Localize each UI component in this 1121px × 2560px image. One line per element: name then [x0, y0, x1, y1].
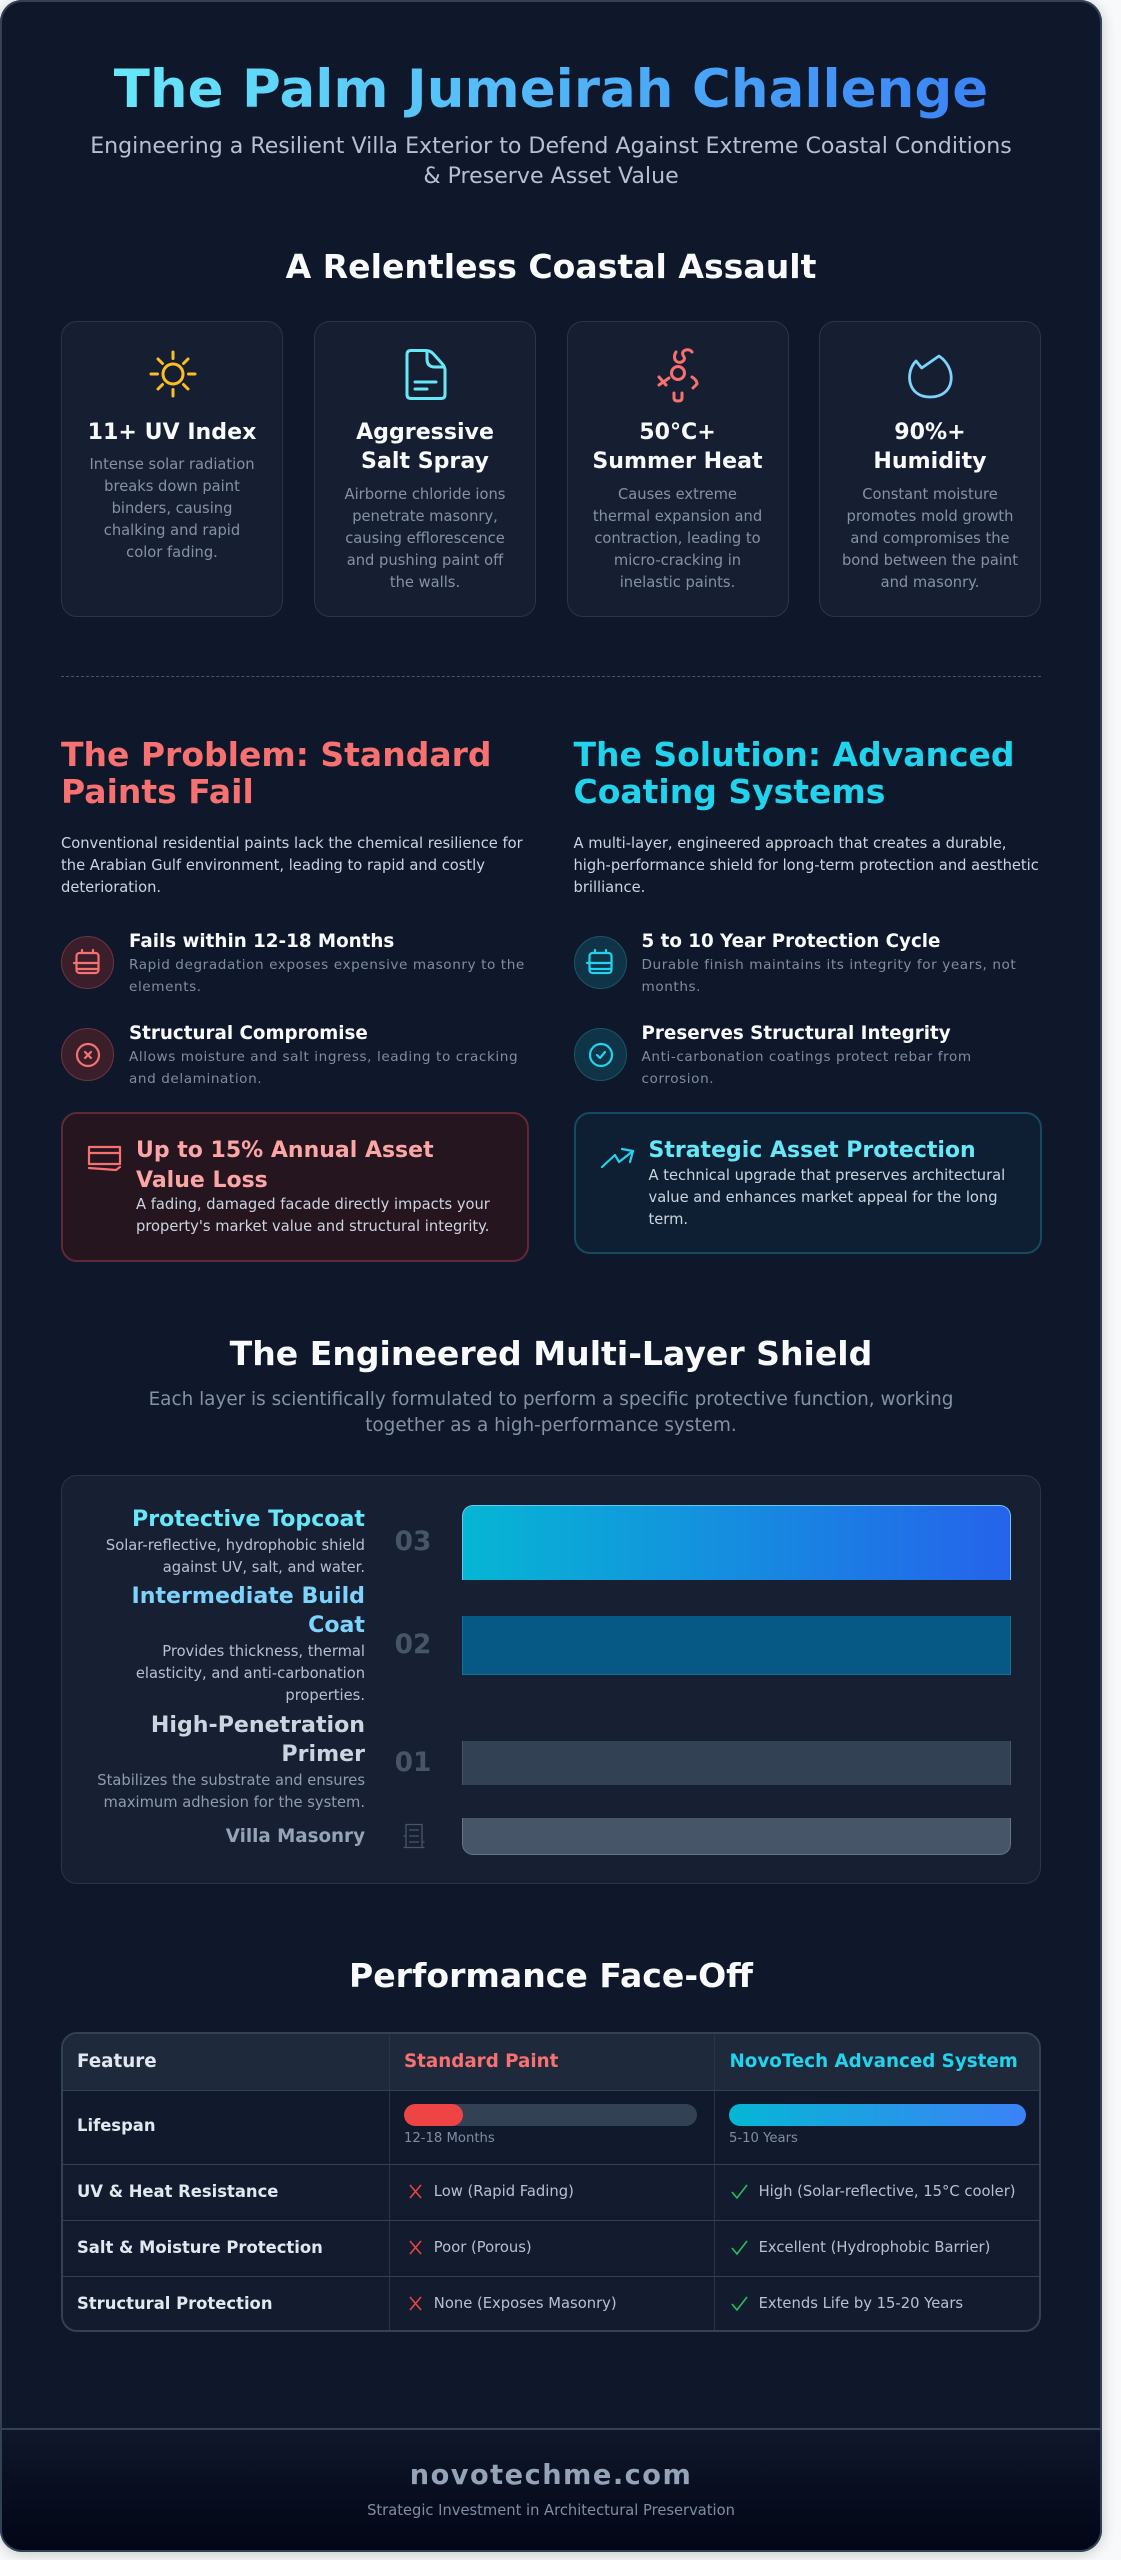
icon: check — [731, 2240, 749, 2255]
callout text: A technical upgrade that preserves architectural — [648, 1167, 1005, 1184]
icon: x circle — [61, 1028, 114, 1081]
card description: Causes extreme — [618, 486, 737, 502]
problem intro text: deterioration. — [61, 879, 161, 896]
item title: 5 to 10 Year Protection Cycle — [642, 931, 940, 952]
problem intro text: the Arabian Gulf environment, leading to rapid and costly — [61, 857, 485, 874]
solution intro text: A multi-layer, engineered approach that creates a durable, — [574, 835, 1006, 852]
row: lifespan: 5-10 Years — [729, 2130, 798, 2146]
layer bar: build coat — [462, 1616, 1011, 1675]
row: salt and moisture: Salt & Moisture Protection — [77, 2238, 323, 2257]
layer label: topcoat — [106, 1506, 365, 1576]
callout: asset value loss — [61, 1112, 529, 1262]
row: salt and moisture: Excellent (Hydrophobic Barrier) — [759, 2238, 990, 2256]
card title: Summer Heat — [592, 448, 763, 474]
problem item: structural compromise — [61, 1023, 518, 1087]
panel: salt spray card — [314, 321, 536, 617]
problem heading: Paints Fail — [61, 772, 254, 811]
card description — [344, 486, 505, 590]
callout text — [648, 1167, 1005, 1228]
layer label: build coat: Intermediate Build — [132, 1583, 365, 1609]
layer label: build coat: elasticity, and anti-carbonation — [136, 1665, 365, 1682]
card title — [592, 419, 763, 474]
icon: check circle — [574, 1028, 626, 1081]
solution intro text: brilliance. — [574, 879, 645, 896]
item text: Durable finish maintains its integrity for years, not — [642, 957, 1016, 973]
icon: calendar — [61, 936, 114, 989]
row: lifespan: Lifespan — [77, 2116, 156, 2135]
card description: bond between the paint — [842, 552, 1018, 568]
item text: Anti-carbonation coatings protect rebar from — [642, 1049, 972, 1065]
solution item: protection cycle — [574, 931, 1016, 995]
icon: check — [732, 2184, 748, 2199]
item title: Structural Compromise — [129, 1023, 368, 1044]
row: structural protection — [63, 2276, 1039, 2332]
item text — [642, 1049, 972, 1087]
layer number 02: 02 — [395, 1629, 431, 1660]
row: UV and heat: Low (Rapid Fading) — [434, 2182, 574, 2200]
subtitle — [90, 133, 1012, 189]
layer number 03: 03 — [395, 1526, 431, 1557]
layer number 01: 01 — [395, 1747, 431, 1778]
layer label: build coat: Coat — [308, 1612, 365, 1638]
row: UV and heat — [63, 2164, 1039, 2220]
callout title: Up to 15% Annual Asset — [136, 1138, 434, 1163]
panel: UV index card — [61, 321, 283, 617]
card description — [89, 456, 255, 561]
solution intro text — [574, 835, 1039, 896]
title: The Palm Jumeirah Challenge — [114, 59, 988, 120]
layer label: primer: Primer — [281, 1741, 365, 1767]
card description: micro-cracking in — [614, 552, 741, 568]
callout text: term. — [648, 1211, 688, 1228]
shield intro text: Each layer is scientifically formulated to perform a specific protective function, working — [149, 1389, 953, 1410]
heading: coastal assault: A Relentless Coastal Assault — [286, 246, 816, 286]
problem heading: The Problem: Standard — [61, 735, 491, 774]
icon: cross — [410, 2240, 422, 2254]
solution intro text: high-performance shield for long-term protection and aesthetic — [574, 857, 1039, 874]
card title: 90%+ — [894, 419, 966, 445]
layer bar: primer — [462, 1741, 1011, 1785]
problem item: fails early — [61, 931, 525, 995]
card description — [842, 486, 1018, 590]
card title — [356, 419, 494, 474]
card description: breaks down paint — [104, 478, 240, 495]
novotech lifespan bar — [729, 2104, 1026, 2126]
item text: months. — [642, 979, 701, 995]
icon: banknotes — [88, 1146, 122, 1172]
card description — [593, 486, 762, 590]
problem intro text — [61, 835, 523, 896]
shield intro text — [149, 1389, 953, 1436]
subtitle: & Preserve Asset Value — [423, 163, 679, 189]
panel: layer diagram — [61, 1475, 1041, 1884]
panel: the problem — [61, 735, 529, 1262]
row: lifespan: 12-18 Months — [404, 2130, 495, 2146]
row: UV and heat: UV & Heat Resistance — [77, 2182, 278, 2201]
item text — [129, 1049, 518, 1087]
layer label: primer — [97, 1712, 365, 1811]
layer label: primer: High-Penetration — [151, 1712, 365, 1738]
card title — [873, 419, 987, 474]
item title: Preserves Structural Integrity — [642, 1023, 951, 1044]
panel: the solution — [574, 735, 1042, 1254]
row: lifespan — [63, 2090, 1039, 2164]
icon: cross — [410, 2184, 422, 2198]
problem intro text: Conventional residential paints lack the chemical resilience for — [61, 835, 523, 852]
icon: masonry building — [404, 1824, 424, 1848]
card description: promotes mold growth — [847, 508, 1013, 524]
layer label: topcoat: Protective Topcoat — [132, 1506, 365, 1532]
table header — [63, 2034, 1039, 2090]
layer bar: topcoat — [462, 1505, 1011, 1580]
item text: corrosion. — [642, 1071, 714, 1087]
layer label: build coat — [132, 1583, 365, 1704]
card title: 11+ UV Index — [88, 419, 256, 445]
card title: Humidity — [873, 448, 987, 474]
callout text — [136, 1196, 490, 1235]
card description: causing efflorescence — [345, 530, 505, 546]
callout title: Strategic Asset Protection — [648, 1138, 976, 1163]
card title: Salt Spray — [361, 448, 489, 474]
problem heading — [61, 735, 491, 811]
card description: thermal expansion and — [593, 508, 762, 524]
card description: penetrate masonry, — [352, 508, 498, 524]
item title: Fails within 12-18 Months — [129, 931, 394, 952]
solution heading — [574, 735, 1015, 811]
card title: 50°C+ — [639, 419, 716, 445]
solution item: structural integrity — [574, 1023, 972, 1087]
card description: Intense solar radiation — [89, 456, 255, 473]
icon: calendar — [574, 936, 626, 989]
callout title — [136, 1138, 434, 1192]
callout title: Value Loss — [136, 1168, 268, 1192]
table header: Feature — [77, 2051, 157, 2072]
item text — [129, 957, 525, 995]
row: UV and heat: High (Solar-reflective, 15°C cooler) — [759, 2182, 1016, 2200]
icon: sun — [150, 350, 196, 398]
card description: the walls. — [390, 574, 460, 590]
panel: summer heat card — [566, 321, 788, 617]
layer label: primer: Stabilizes the substrate and ensures — [97, 1772, 365, 1789]
table header: Standard Paint — [404, 2051, 558, 2072]
card description: binders, causing — [112, 500, 232, 517]
item text: elements. — [129, 979, 202, 995]
item text — [642, 957, 1016, 995]
icon: water drop — [908, 354, 953, 398]
solution heading: The Solution: Advanced — [574, 735, 1015, 774]
icon: check — [731, 2296, 749, 2311]
row: structural protection: Extends Life by 15-20 Years — [759, 2294, 963, 2312]
footer brand: novotechme.com — [410, 2460, 692, 2491]
card description: inelastic paints. — [620, 574, 735, 590]
heading: performance face-off: Performance Face-Off — [349, 1956, 753, 1995]
comparison table — [61, 2032, 1041, 2332]
layer label: masonry: Villa Masonry — [226, 1826, 365, 1847]
subtitle: Engineering a Resilient Villa Exterior to Defend Against Extreme Coastal Conditions — [90, 133, 1012, 159]
layer label: build coat: Provides thickness, thermal — [162, 1643, 365, 1660]
card description: and compromises the — [850, 530, 1010, 546]
table header: NovoTech Advanced System — [730, 2051, 1018, 2072]
item text: and delamination. — [129, 1071, 262, 1087]
heading: multi-layer shield: The Engineered Multi-Layer Shield — [230, 1334, 872, 1372]
row: salt and moisture — [63, 2220, 1039, 2276]
footer — [2, 2428, 1100, 2550]
panel: humidity card — [819, 321, 1041, 617]
card description: contraction, leading to — [594, 530, 761, 546]
solution heading: Coating Systems — [574, 772, 885, 811]
icon: trending up — [600, 1148, 634, 1168]
row: salt and moisture: Poor (Porous) — [434, 2238, 532, 2256]
row: structural protection: None (Exposes Masonry) — [434, 2294, 617, 2312]
card title: Aggressive — [356, 419, 494, 445]
callout text: value and enhances market appeal for the long — [648, 1189, 998, 1206]
callout: strategic asset protection — [574, 1112, 1042, 1254]
card description: Constant moisture — [862, 486, 998, 502]
icon: cross — [409, 2296, 422, 2311]
card description: and masonry. — [881, 574, 979, 590]
item text: Rapid degradation exposes expensive masonry to the — [129, 957, 525, 973]
layer label: topcoat: against UV, salt, and water. — [163, 1559, 365, 1576]
layer label: build coat: properties. — [285, 1687, 365, 1704]
layer label: topcoat: Solar-reflective, hydrophobic shield — [106, 1537, 365, 1554]
card description: and pushing paint off — [347, 552, 503, 568]
standard paint lifespan bar — [404, 2104, 697, 2126]
card description: color fading. — [126, 544, 218, 561]
card description: Airborne chloride ions — [345, 486, 505, 502]
icon: document — [406, 349, 446, 400]
card description: chalking and rapid — [104, 522, 240, 539]
item text: Allows moisture and salt ingress, leading to cracking — [129, 1049, 518, 1065]
callout text: A fading, damaged facade directly impacts your — [136, 1196, 490, 1213]
layer label: primer: maximum adhesion for the system. — [104, 1794, 365, 1811]
layer bar: masonry — [462, 1818, 1011, 1855]
row: structural protection: Structural Protection — [77, 2294, 272, 2313]
callout text: property's market value and structural integrity. — [136, 1218, 489, 1235]
shield intro text: together as a high-performance system. — [365, 1415, 737, 1436]
icon: heat — [657, 348, 698, 402]
footer tagline: Strategic Investment in Architectural Preservation — [367, 2502, 735, 2519]
